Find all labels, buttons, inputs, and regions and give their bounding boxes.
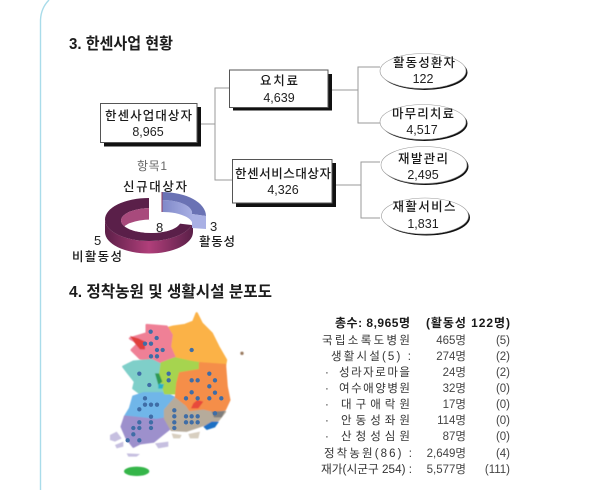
org chart: leprosy program breakdown bbox=[100, 54, 470, 236]
row: 안동성좌원: 안동성좌원 bbox=[341, 413, 410, 427]
row: 여수애양병원: (0) bbox=[496, 383, 510, 395]
label: 신규대상자: 신규대상자 bbox=[123, 180, 187, 194]
table header row: 총수: 8,965명 bbox=[335, 316, 410, 330]
row: 생활시설: 274명 bbox=[436, 350, 466, 363]
region: Gyeongbuk bbox=[176, 363, 229, 411]
oval: 재활서비스 bbox=[382, 198, 470, 236]
row: 안동성좌원 bbox=[325, 413, 510, 427]
ring chart title: 항목1 bbox=[137, 159, 167, 173]
region: Gyeongnam bbox=[165, 397, 225, 431]
oval: 재활서비스: 1,831 bbox=[407, 217, 439, 231]
row: 성라자로마을: 24명 bbox=[443, 366, 466, 379]
oval: 활동성환자: 122 bbox=[413, 72, 433, 86]
row: 재가: (111) bbox=[485, 464, 510, 476]
row: 재가: 재가(시군구 254) : bbox=[321, 463, 412, 476]
heading: section 3: 3. 한센사업 현황 bbox=[69, 35, 173, 53]
oval: 재활서비스: 재활서비스 bbox=[392, 199, 456, 214]
oval: 마무리치료 bbox=[380, 104, 468, 141]
statistics table bbox=[321, 316, 510, 476]
row: 정착농원 bbox=[324, 446, 510, 460]
oval: 재발관리: 재발관리 bbox=[398, 151, 448, 166]
value: 3: 3 bbox=[210, 219, 217, 234]
map: South Korea distribution bbox=[110, 313, 244, 476]
region: Gyeonggi bbox=[130, 325, 175, 364]
region: Chungnam bbox=[123, 360, 165, 395]
row: 생활시설: 생활시설(5) : bbox=[331, 349, 411, 363]
row: 여수애양병원: · bbox=[325, 383, 329, 395]
facility markers bbox=[125, 329, 223, 442]
row: 안동성좌원: 114명 bbox=[437, 414, 466, 427]
box: 요치료: 4,639 bbox=[263, 91, 295, 105]
row: 정착농원: (4) bbox=[496, 448, 510, 460]
oval: 마무리치료: 4,517 bbox=[406, 123, 438, 137]
row: 생활시설 bbox=[331, 349, 510, 363]
box: 한센서비스대상자: 한센서비스대상자 bbox=[235, 167, 331, 181]
full page infographic bbox=[40, 0, 510, 490]
row: 산청성심원: (0) bbox=[496, 431, 510, 443]
island: Jeju bbox=[124, 467, 149, 476]
row: 정착농원: 정착농원(86) : bbox=[324, 446, 412, 460]
box: 요치료: 요치료 bbox=[260, 74, 298, 88]
table header row bbox=[335, 316, 510, 330]
row: 대구애락원 bbox=[325, 397, 510, 411]
region: Chungbuk bbox=[160, 358, 200, 393]
box: 요치료 bbox=[230, 70, 332, 110]
row: 안동성좌원: · bbox=[325, 415, 329, 427]
row: 대구애락원: 대구애락원 bbox=[341, 397, 410, 411]
oval: 재발관리: 2,495 bbox=[407, 168, 439, 182]
value: 8: 8 bbox=[156, 220, 163, 235]
oval: 활동성환자: 활동성환자 bbox=[393, 55, 455, 70]
row: 성라자로마을: (2) bbox=[496, 367, 510, 379]
row: 성라자로마을: 성라자로마을 bbox=[339, 366, 410, 379]
box: 한센사업대상자 bbox=[100, 104, 201, 146]
row: 대구애락원: 17명 bbox=[443, 398, 466, 411]
ring segment: active (blue) bbox=[162, 192, 206, 229]
row: 성라자로마을: · bbox=[325, 367, 329, 379]
row: 재가 bbox=[321, 463, 510, 476]
row: 국립소록도병원: (5) bbox=[496, 335, 510, 347]
3D ring chart: active vs inactive bbox=[72, 159, 235, 264]
row: 여수애양병원 bbox=[325, 381, 510, 395]
oval: 활동성환자 bbox=[380, 54, 468, 90]
box: 한센사업대상자: 한센사업대상자 bbox=[105, 109, 192, 123]
region: Gangwon bbox=[167, 313, 226, 366]
row: 생활시설: (2) bbox=[496, 351, 510, 363]
row: 국립소록도병원 bbox=[322, 333, 510, 347]
row: 산청성심원: 산청성심원 bbox=[341, 429, 410, 443]
row: 산청성심원 bbox=[325, 429, 510, 443]
heading: section 4: 4. 정착농원 및 생활시설 분포도 bbox=[69, 283, 272, 301]
row: 산청성심원: 87명 bbox=[443, 430, 466, 443]
box: 한센서비스대상자 bbox=[232, 160, 336, 207]
oval: 마무리치료: 마무리치료 bbox=[392, 107, 454, 121]
row: 대구애락원: · bbox=[325, 399, 329, 411]
region: Jeonnam bbox=[122, 417, 170, 447]
row: 대구애락원: (0) bbox=[496, 399, 510, 411]
value: 5: 5 bbox=[94, 233, 101, 248]
row: 국립소록도병원: 국립소록도병원 bbox=[322, 333, 410, 347]
table header row: (활동성 122명) bbox=[426, 316, 510, 330]
label: 활동성: 활동성 bbox=[199, 234, 235, 249]
row: 국립소록도병원: 465명 bbox=[436, 334, 466, 347]
oval: 재발관리 bbox=[381, 146, 468, 185]
region: Jeonbuk bbox=[125, 393, 176, 420]
row: 안동성좌원: (0) bbox=[496, 415, 510, 427]
box: 한센서비스대상자: 4,326 bbox=[267, 183, 299, 197]
box: 한센사업대상자: 8,965 bbox=[132, 125, 164, 139]
row: 산청성심원: · bbox=[325, 431, 329, 443]
row: 여수애양병원: 여수애양병원 bbox=[339, 381, 410, 395]
row: 성라자로마을 bbox=[325, 366, 510, 379]
row: 정착농원: 2,649명 bbox=[427, 447, 466, 460]
row: 재가: 5,577명 bbox=[427, 463, 466, 476]
label: 비활동성: 비활동성 bbox=[72, 249, 122, 264]
ring segment: inactive (dark magenta) bbox=[105, 198, 193, 254]
row: 여수애양병원: 32명 bbox=[443, 382, 466, 395]
